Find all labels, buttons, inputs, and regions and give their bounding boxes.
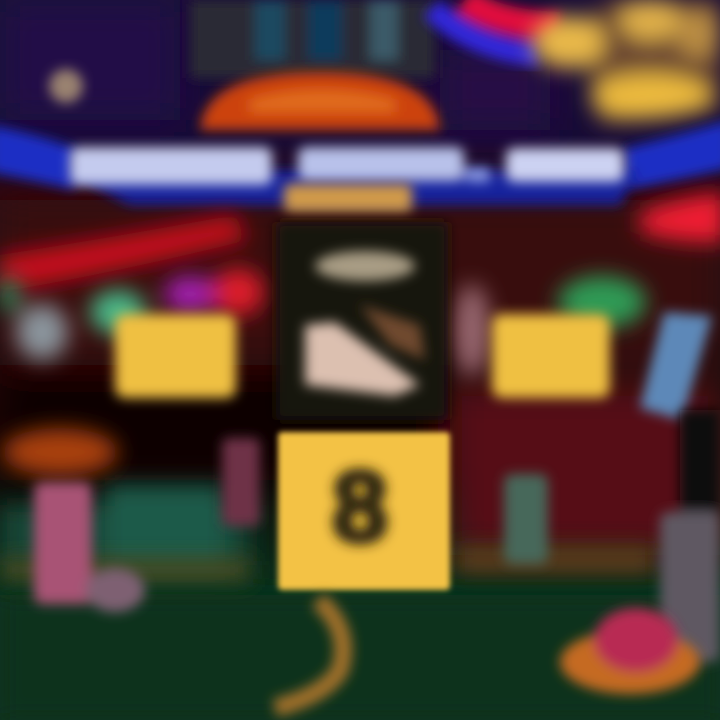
digit 8: 8 — [332, 451, 388, 563]
right teal chip stack — [504, 474, 548, 564]
right yellow box — [492, 314, 610, 398]
blue neon band — [0, 120, 720, 205]
right phone card — [640, 312, 712, 420]
top right gold chandelier — [532, 0, 720, 125]
bottom right chip pile — [560, 608, 700, 694]
background: green casino floor — [0, 485, 720, 720]
bottom gold path — [275, 600, 343, 708]
orange dome — [200, 72, 440, 130]
center big yellow box — [278, 432, 450, 590]
left floor glow — [0, 428, 655, 580]
panel picture — [305, 251, 425, 396]
white headline band — [70, 147, 624, 185]
background: upper wall — [0, 0, 720, 555]
gold plaque under headline — [284, 184, 412, 212]
left yellow box — [115, 314, 236, 398]
top columns — [190, 0, 435, 78]
left pink chip stack — [34, 438, 260, 612]
colorful chips row — [0, 268, 646, 376]
center black panel — [276, 222, 448, 420]
top left lamp — [49, 69, 83, 103]
red neon streaks — [0, 192, 720, 292]
right dark figure and grey stack — [660, 410, 720, 662]
top right neon arc — [432, 0, 560, 55]
